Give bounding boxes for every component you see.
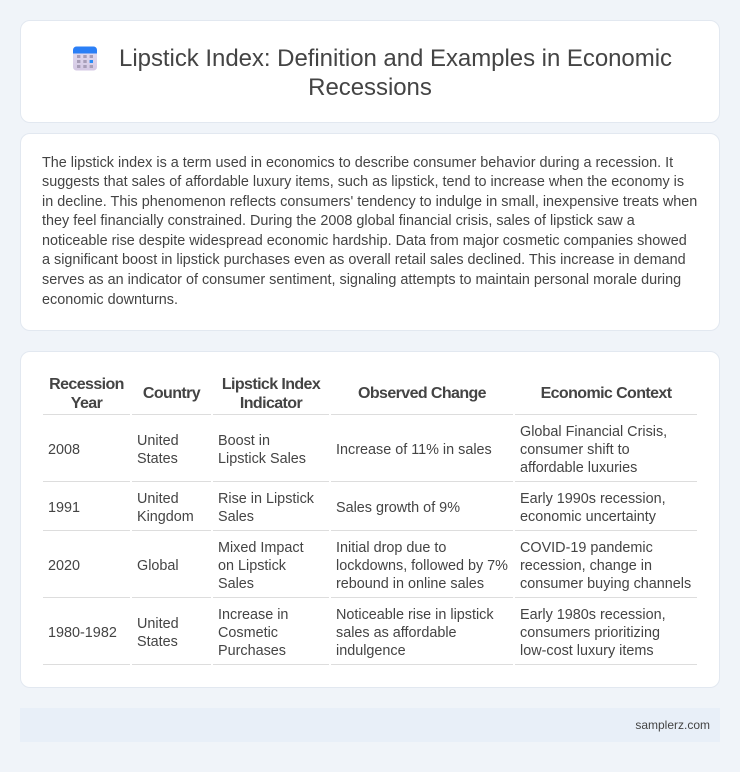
- data table: Early 1990s recession,: [520, 490, 666, 506]
- text block: description: noticeable rise despite widespread economic hardship. Data from major cosmetic companies showed: [42, 233, 687, 249]
- data table: Noticeable rise in lipstick: [336, 606, 494, 622]
- data table: Year: [71, 394, 102, 412]
- data table: consumer shift to: [520, 442, 630, 458]
- data table: sales as affordable: [336, 624, 457, 640]
- data table: Purchases: [218, 642, 286, 658]
- text block: description: suggests that sales of affordable luxury items, such as lipstick, tend to increase when the economy is: [42, 174, 684, 190]
- data table: States: [137, 450, 178, 466]
- data table: Kingdom: [137, 508, 194, 524]
- title: Lipstick Index: Definition and Examples in Economic: [119, 45, 672, 72]
- data table: 1991: [48, 500, 80, 516]
- data table: Country: [143, 385, 200, 402]
- text block: description: [42, 154, 697, 308]
- title: [119, 45, 672, 101]
- data table: economic uncertainty: [520, 508, 656, 524]
- title: Recessions: [308, 74, 432, 101]
- data table: United: [137, 432, 179, 448]
- data table: indulgence: [336, 642, 406, 658]
- data table: Mixed Impact: [218, 540, 304, 556]
- icon: calendar: [73, 46, 97, 70]
- data table: lockdowns, followed by 7%: [336, 558, 508, 574]
- data table: Lipstick Index: [222, 376, 320, 393]
- data table: Observed Change: [358, 385, 486, 402]
- data table: Recession: [49, 376, 124, 393]
- data table: low-cost luxury items: [520, 642, 654, 658]
- data table: 2008: [48, 442, 80, 458]
- data table: Global Financial Crisis,: [520, 424, 667, 440]
- data table: Early 1980s recession,: [520, 606, 666, 622]
- text block: description: The lipstick index is a term used in economics to describe consumer behavior during a recession. It: [42, 154, 673, 170]
- data table: rebound in online sales: [336, 576, 484, 592]
- data table: consumer buying channels: [520, 576, 691, 592]
- data table: Sales growth of 9%: [336, 500, 460, 516]
- data table: Indicator: [240, 394, 302, 412]
- data table: States: [137, 634, 178, 650]
- data table: COVID-19 pandemic: [520, 540, 653, 556]
- data table: Sales: [218, 508, 254, 524]
- data table: Initial drop due to: [336, 540, 446, 556]
- footer bar: [20, 708, 720, 742]
- data table: United: [137, 490, 179, 506]
- data table: Rise in Lipstick: [218, 490, 314, 506]
- data table: Boost in: [218, 432, 270, 448]
- data table: recession, change in: [520, 558, 652, 574]
- data table: 1980-1982: [48, 624, 117, 640]
- text block: description: serves as an indicator of consumer sentiment, signaling attempts to maintain personal morale during: [42, 272, 681, 288]
- text block: description: they feel financially constrained. During the 2008 global financial crisis, sales of lipstick saw a: [42, 213, 635, 229]
- text block: description: in decline. This phenomenon reflects consumers' tendency to indulge in small, inexpensive treats when: [42, 194, 697, 210]
- panel: header: [20, 20, 720, 123]
- data table: Sales: [218, 576, 254, 592]
- data table: Cosmetic: [218, 624, 278, 640]
- data table: affordable luxuries: [520, 460, 637, 476]
- data table: [43, 376, 697, 665]
- data table: consumers prioritizing: [520, 624, 660, 640]
- text block: description: economic downturns.: [42, 292, 178, 308]
- footer text: source: samplerz.com: [635, 718, 710, 732]
- data table: Increase of 11% in sales: [336, 442, 492, 458]
- data table: Increase in: [218, 606, 288, 622]
- data table: 2020: [48, 558, 80, 574]
- data table: Lipstick Sales: [218, 450, 306, 466]
- data table: on Lipstick: [218, 558, 286, 574]
- panel: recession table: [20, 351, 720, 688]
- data table: Economic Context: [541, 385, 671, 402]
- data table: Global: [137, 558, 179, 574]
- text block: description: a significant boost in lipstick purchases even as overall retail sales declined. This increase in demand: [42, 252, 686, 268]
- panel: introduction text: [20, 133, 720, 331]
- data table: United: [137, 616, 179, 632]
